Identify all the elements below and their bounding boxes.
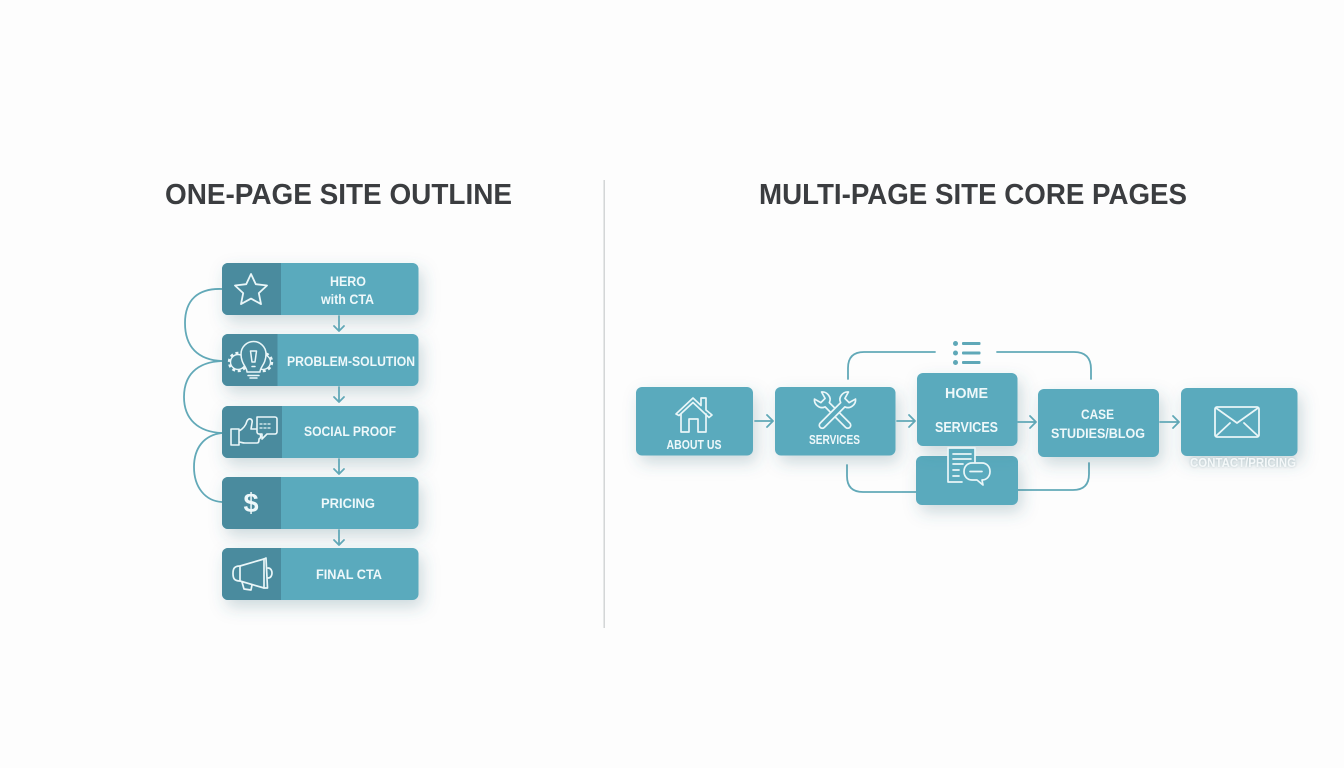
page card: services [775, 387, 896, 456]
arrow: case studies to contact [1160, 416, 1179, 428]
title: one-page site outline: ONE-PAGE SITE OUTLINE [165, 179, 512, 211]
label: about us: ABOUT US [666, 438, 722, 452]
icon: light bulb with gears [229, 342, 272, 378]
arrow: pricing to final CTA [334, 530, 344, 545]
step: final CTA [222, 548, 418, 600]
label: services: SERVICES [935, 420, 998, 436]
lower card with document icon [916, 456, 1018, 505]
icon: star [235, 274, 267, 304]
page card: case studies and blog [1038, 389, 1159, 457]
icon: crossed wrenches [813, 390, 857, 433]
step: problem-solution [222, 334, 418, 386]
label: problem-solution: PROBLEM-SOLUTION [287, 354, 415, 369]
icon: dollar sign: $ [243, 488, 259, 518]
page card: home and services [917, 373, 1018, 446]
page card: contact and pricing [1181, 388, 1298, 470]
panel: multi-page site core pages [636, 341, 1298, 505]
icon: envelope [1215, 407, 1259, 437]
arrow: problem-solution to social proof [334, 387, 344, 402]
step: hero with CTA [222, 263, 418, 315]
label: case: CASE [1081, 407, 1114, 422]
icon: house [676, 398, 712, 432]
icon: thumbs up with speech bubble [231, 417, 277, 445]
step: pricing [222, 477, 418, 529]
connector: top bracket [848, 352, 1091, 379]
title: multi-page site core pages: MULTI-PAGE SITE CORE PAGES [759, 179, 1187, 211]
panel: one-page site outline [184, 263, 418, 600]
label: social proof: SOCIAL PROOF [304, 424, 396, 439]
arrow: social proof to pricing [334, 459, 344, 474]
label: home: HOME [945, 386, 988, 402]
label: pricing: PRICING [321, 496, 375, 511]
vertical divider between panels [604, 180, 605, 628]
label: studies/blog: STUDIES/BLOG [1051, 426, 1145, 441]
connector: bottom bracket [847, 463, 1089, 492]
label: contact/pricing: CONTACT/PRICING [1190, 456, 1296, 470]
label: final CTA: FINAL CTA [316, 567, 382, 582]
arrow: services to home [897, 415, 915, 427]
label: services: SERVICES [809, 433, 860, 447]
arrow: hero to problem-solution [334, 316, 344, 331]
page card: about us [636, 387, 753, 456]
arrow: home to case studies [1018, 416, 1036, 428]
icon: document with speech bubble [948, 448, 990, 485]
label: with CTA: with CTA [320, 292, 374, 307]
icon: list [953, 341, 980, 365]
icon: megaphone [233, 558, 272, 590]
looping connectors on the left [184, 289, 222, 502]
step: social proof [222, 406, 418, 458]
label: hero: HERO [330, 274, 366, 289]
arrow: about us to services [755, 415, 773, 427]
